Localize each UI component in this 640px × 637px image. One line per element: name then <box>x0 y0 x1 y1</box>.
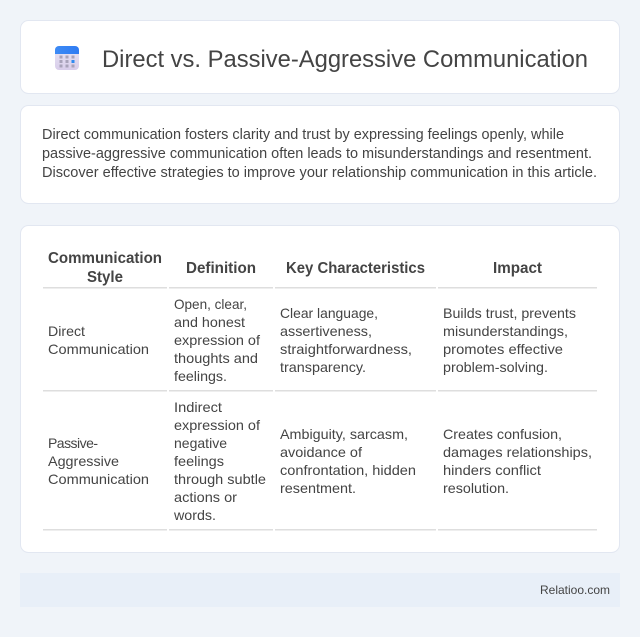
text block: introduction: passive-aggressive communication often leads to misunderstandings and resentment. <box>42 146 592 162</box>
table row: direct communication: and honest <box>174 314 245 330</box>
footer <box>20 573 620 607</box>
text block: introduction: Discover effective strategies to improve your relationship communication in this article. <box>42 165 597 181</box>
table row: passive-aggressive communication: damages relationships, <box>443 444 592 460</box>
table row: direct communication: thoughts and <box>174 350 258 366</box>
table header row <box>48 250 543 286</box>
table row: passive-aggressive communication: negative <box>174 435 227 451</box>
table header row: Style <box>87 269 123 286</box>
table row: passive-aggressive communication: actions or <box>174 489 237 505</box>
table row: direct communication: expression of <box>174 332 260 348</box>
table header row: Key Characteristics <box>286 260 425 277</box>
table header row: Communication <box>48 250 162 267</box>
table row: direct communication: feelings. <box>174 368 227 384</box>
table row: direct communication <box>48 296 576 384</box>
table row: passive-aggressive communication: feelings <box>174 453 224 469</box>
table row: direct communication: misunderstandings, <box>443 323 568 339</box>
table row: direct communication: Clear language, <box>280 305 378 321</box>
table row: direct communication: transparency. <box>280 359 366 375</box>
table row: passive-aggressive communication <box>48 399 592 523</box>
table row: passive-aggressive communication: through subtle <box>174 471 266 487</box>
text block: introduction: Direct communication fosters clarity and trust by expressing feelings openly, while <box>42 127 564 143</box>
table row: passive-aggressive communication: avoidance of <box>280 444 362 460</box>
panel: comparison table <box>20 226 620 552</box>
text block: introduction <box>42 127 597 181</box>
table row: direct communication: Builds trust, prevents <box>443 305 576 321</box>
table row: direct communication: promotes effective <box>443 341 563 357</box>
table row: passive-aggressive communication: expression of <box>174 417 260 433</box>
table row: passive-aggressive communication: Indirect <box>174 399 222 415</box>
table row: passive-aggressive communication: confrontation, hidden <box>280 462 416 478</box>
table row: direct communication: Open, clear, <box>174 296 247 312</box>
table row: passive-aggressive communication: words. <box>173 507 216 523</box>
table header row: Definition <box>186 260 256 277</box>
footer: Relatioo.com <box>540 583 610 597</box>
panel: header <box>20 20 620 94</box>
table row: passive-aggressive communication: resentment. <box>280 480 356 496</box>
table row: passive-aggressive communication: resolution. <box>443 480 509 496</box>
table row: direct communication: problem-solving. <box>443 359 548 375</box>
panel: introduction <box>20 106 620 204</box>
table row: passive-aggressive communication: Passive- <box>48 435 98 451</box>
table row: direct communication: Direct <box>48 323 85 339</box>
table row: passive-aggressive communication: hinders conflict <box>443 462 541 478</box>
icon: calendar <box>55 46 79 70</box>
table row: direct communication: straightforwardness, <box>280 341 412 357</box>
title: Direct vs. Passive-Aggressive Communication <box>102 46 588 73</box>
table header row: Impact <box>493 260 543 277</box>
table row: passive-aggressive communication: Communication <box>48 471 149 487</box>
table row: direct communication: Communication <box>48 341 149 357</box>
table row: direct communication: assertiveness, <box>280 323 372 339</box>
table row: passive-aggressive communication: Creates confusion, <box>443 426 562 442</box>
table row: passive-aggressive communication: Ambiguity, sarcasm, <box>280 426 408 442</box>
table row: passive-aggressive communication: Aggressive <box>48 453 119 469</box>
